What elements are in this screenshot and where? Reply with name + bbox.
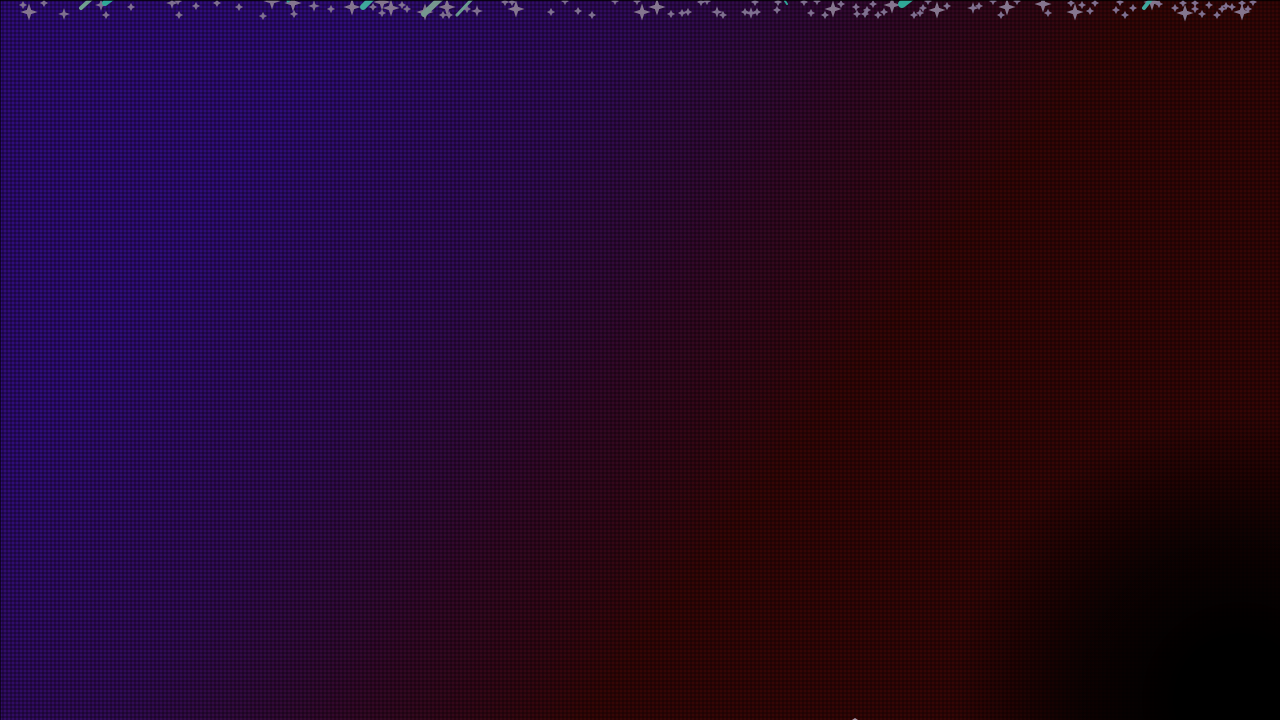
teal streaks [81, 0, 1152, 15]
small sparkles [20, 0, 1256, 19]
bottom edge marker [852, 718, 858, 720]
medium sparkles [60, 0, 977, 18]
dark left edge [0, 0, 1, 720]
dark top edge [0, 0, 1280, 1]
large sparkles [23, 0, 1248, 19]
